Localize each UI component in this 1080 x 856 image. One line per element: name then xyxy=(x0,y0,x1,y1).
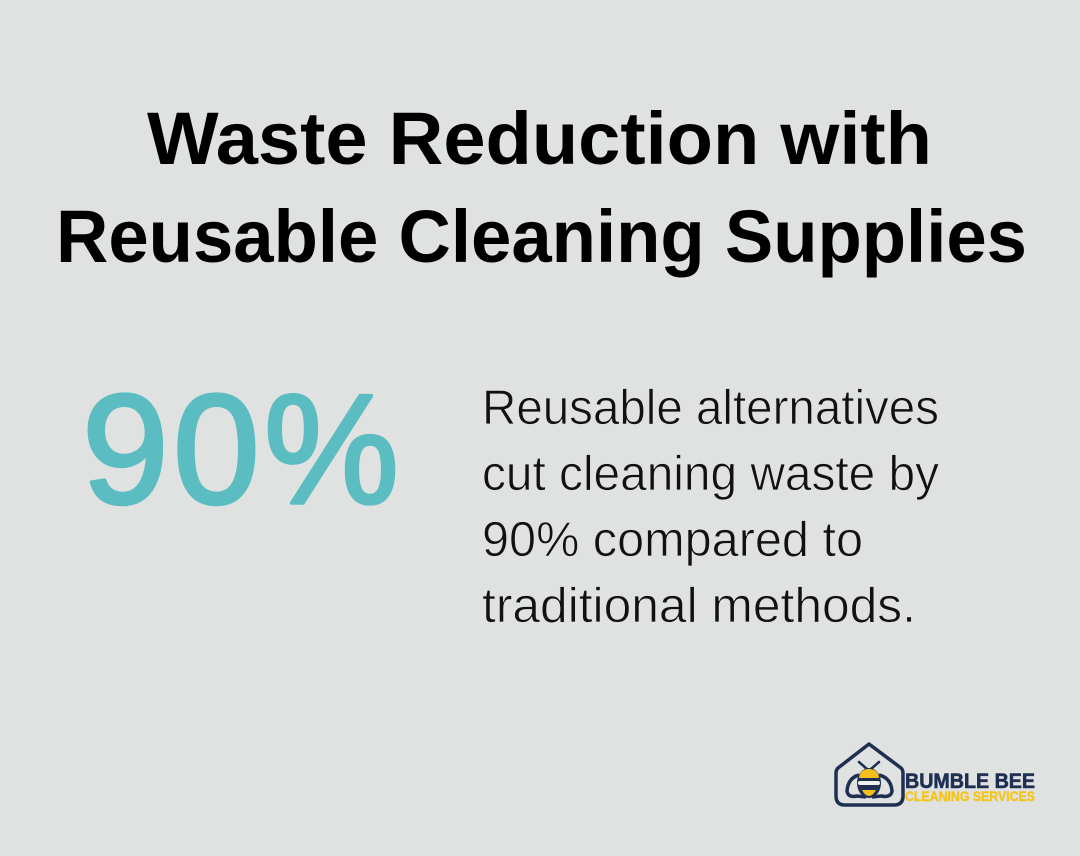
description text xyxy=(482,381,939,633)
icon: house outline with bee xyxy=(836,744,903,805)
title: Reusable Cleaning Supplies xyxy=(56,195,1027,278)
big statistic: 90%: % xyxy=(264,363,399,537)
title xyxy=(56,97,1027,278)
logo tagline: CLEANING SERVICES xyxy=(905,788,1035,804)
description text: cut cleaning waste by xyxy=(482,447,939,501)
big statistic: 90%: 0 xyxy=(173,363,260,537)
title: Waste Reduction with xyxy=(147,97,932,180)
logo wordmark: BUMBLE BEE xyxy=(905,770,1035,793)
logo: Bumble Bee Cleaning Services xyxy=(836,744,1035,805)
description text: Reusable alternatives xyxy=(482,381,939,435)
description text: traditional methods. xyxy=(482,579,916,633)
description text: 90% compared to xyxy=(482,513,863,567)
big statistic: 90% xyxy=(82,363,399,537)
big statistic: 90%: 9 xyxy=(82,363,169,537)
